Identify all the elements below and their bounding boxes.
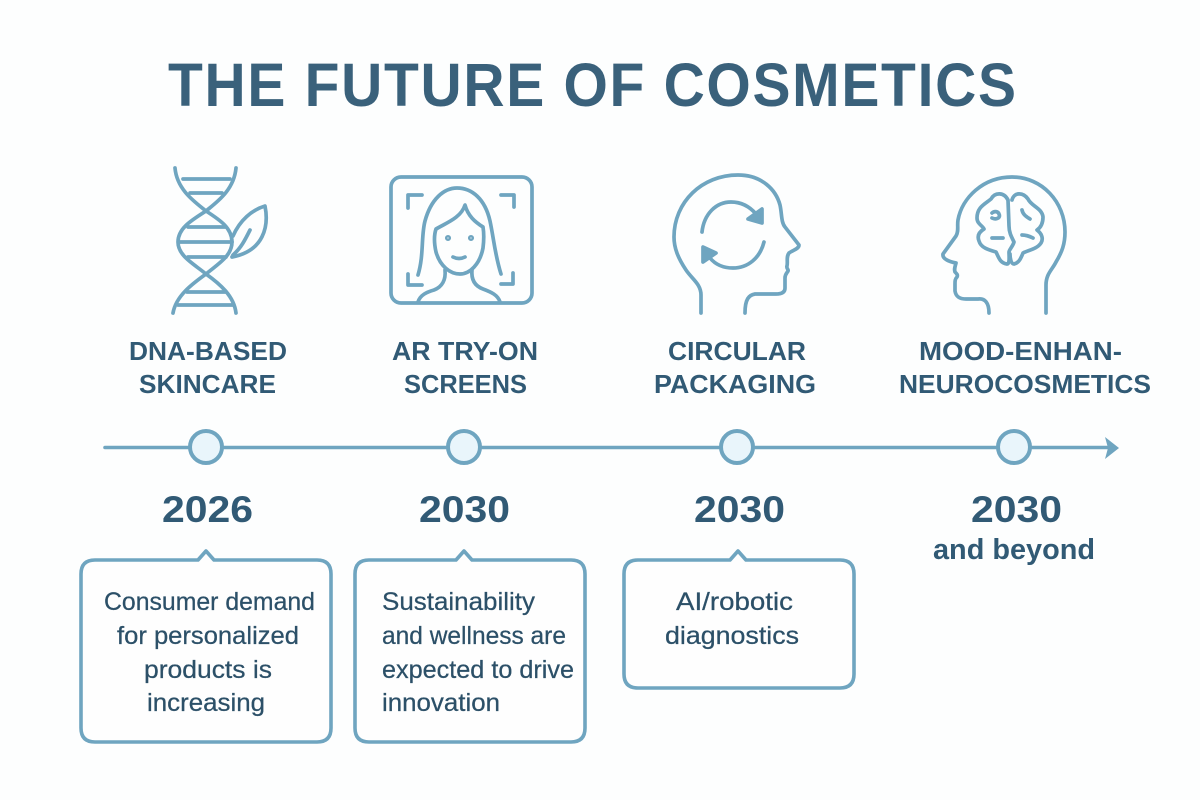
callout: sustainability and wellness: expected to drive bbox=[382, 656, 574, 684]
label: DNA-based skincare bbox=[129, 336, 287, 399]
callout: sustainability and wellness: Sustainability bbox=[382, 588, 536, 616]
timeline node 2026 bbox=[190, 431, 222, 463]
callout: sustainability and wellness: and wellness are bbox=[382, 622, 566, 650]
label: AR try-on screens: AR TRY-ON bbox=[392, 336, 538, 366]
icon: head with circular arrows bbox=[674, 175, 799, 313]
callout: consumer demand: Consumer demand bbox=[104, 588, 315, 616]
callout: consumer demand: products is bbox=[144, 656, 272, 684]
year 2030 and beyond: 2030 bbox=[971, 489, 1062, 530]
callout: consumer demand bbox=[81, 551, 331, 742]
timeline node 2030 and beyond bbox=[998, 431, 1030, 463]
callout: AI/robotic diagnostics: diagnostics bbox=[665, 622, 799, 650]
callout: AI/robotic diagnostics: AI/robotic bbox=[676, 588, 793, 616]
callout: consumer demand: for personalized bbox=[117, 622, 299, 650]
label: DNA-based skincare: DNA-BASED bbox=[129, 336, 287, 366]
icon: DNA helix with leaf bbox=[173, 168, 266, 313]
callout: AI/robotic diagnostics bbox=[624, 551, 854, 688]
year 2026: 2026 bbox=[162, 489, 253, 530]
label: circular packaging bbox=[654, 336, 816, 399]
label: DNA-based skincare: SKINCARE bbox=[139, 369, 276, 399]
title: THE FUTURE OF COSMETICS bbox=[168, 50, 1016, 119]
label: mood-enhancing neurocosmetics: NEUROCOSMETICS bbox=[899, 369, 1151, 399]
label: mood-enhancing neurocosmetics: MOOD-ENHAN- bbox=[919, 336, 1122, 366]
label: circular packaging: CIRCULAR bbox=[668, 336, 806, 366]
label: circular packaging: PACKAGING bbox=[654, 369, 816, 399]
label: AR try-on screens bbox=[392, 336, 538, 399]
callout: sustainability and wellness: innovation bbox=[382, 689, 500, 717]
year 2030 and beyond: and beyond bbox=[933, 534, 1095, 566]
icon: head with brain bbox=[943, 177, 1065, 313]
year 2030: 2030 bbox=[419, 489, 510, 530]
timeline arrow bbox=[105, 437, 1119, 459]
icon: AR face scan screen bbox=[391, 177, 532, 303]
label: mood-enhancing neurocosmetics bbox=[899, 336, 1151, 399]
timeline node 2030 bbox=[448, 431, 480, 463]
callout: sustainability and wellness bbox=[355, 551, 585, 742]
label: AR try-on screens: SCREENS bbox=[404, 369, 527, 399]
year 2030 and beyond bbox=[933, 489, 1095, 566]
timeline node 2030 circular bbox=[721, 431, 753, 463]
year 2030: 2030 bbox=[694, 489, 785, 530]
callout: consumer demand: increasing bbox=[147, 689, 265, 717]
